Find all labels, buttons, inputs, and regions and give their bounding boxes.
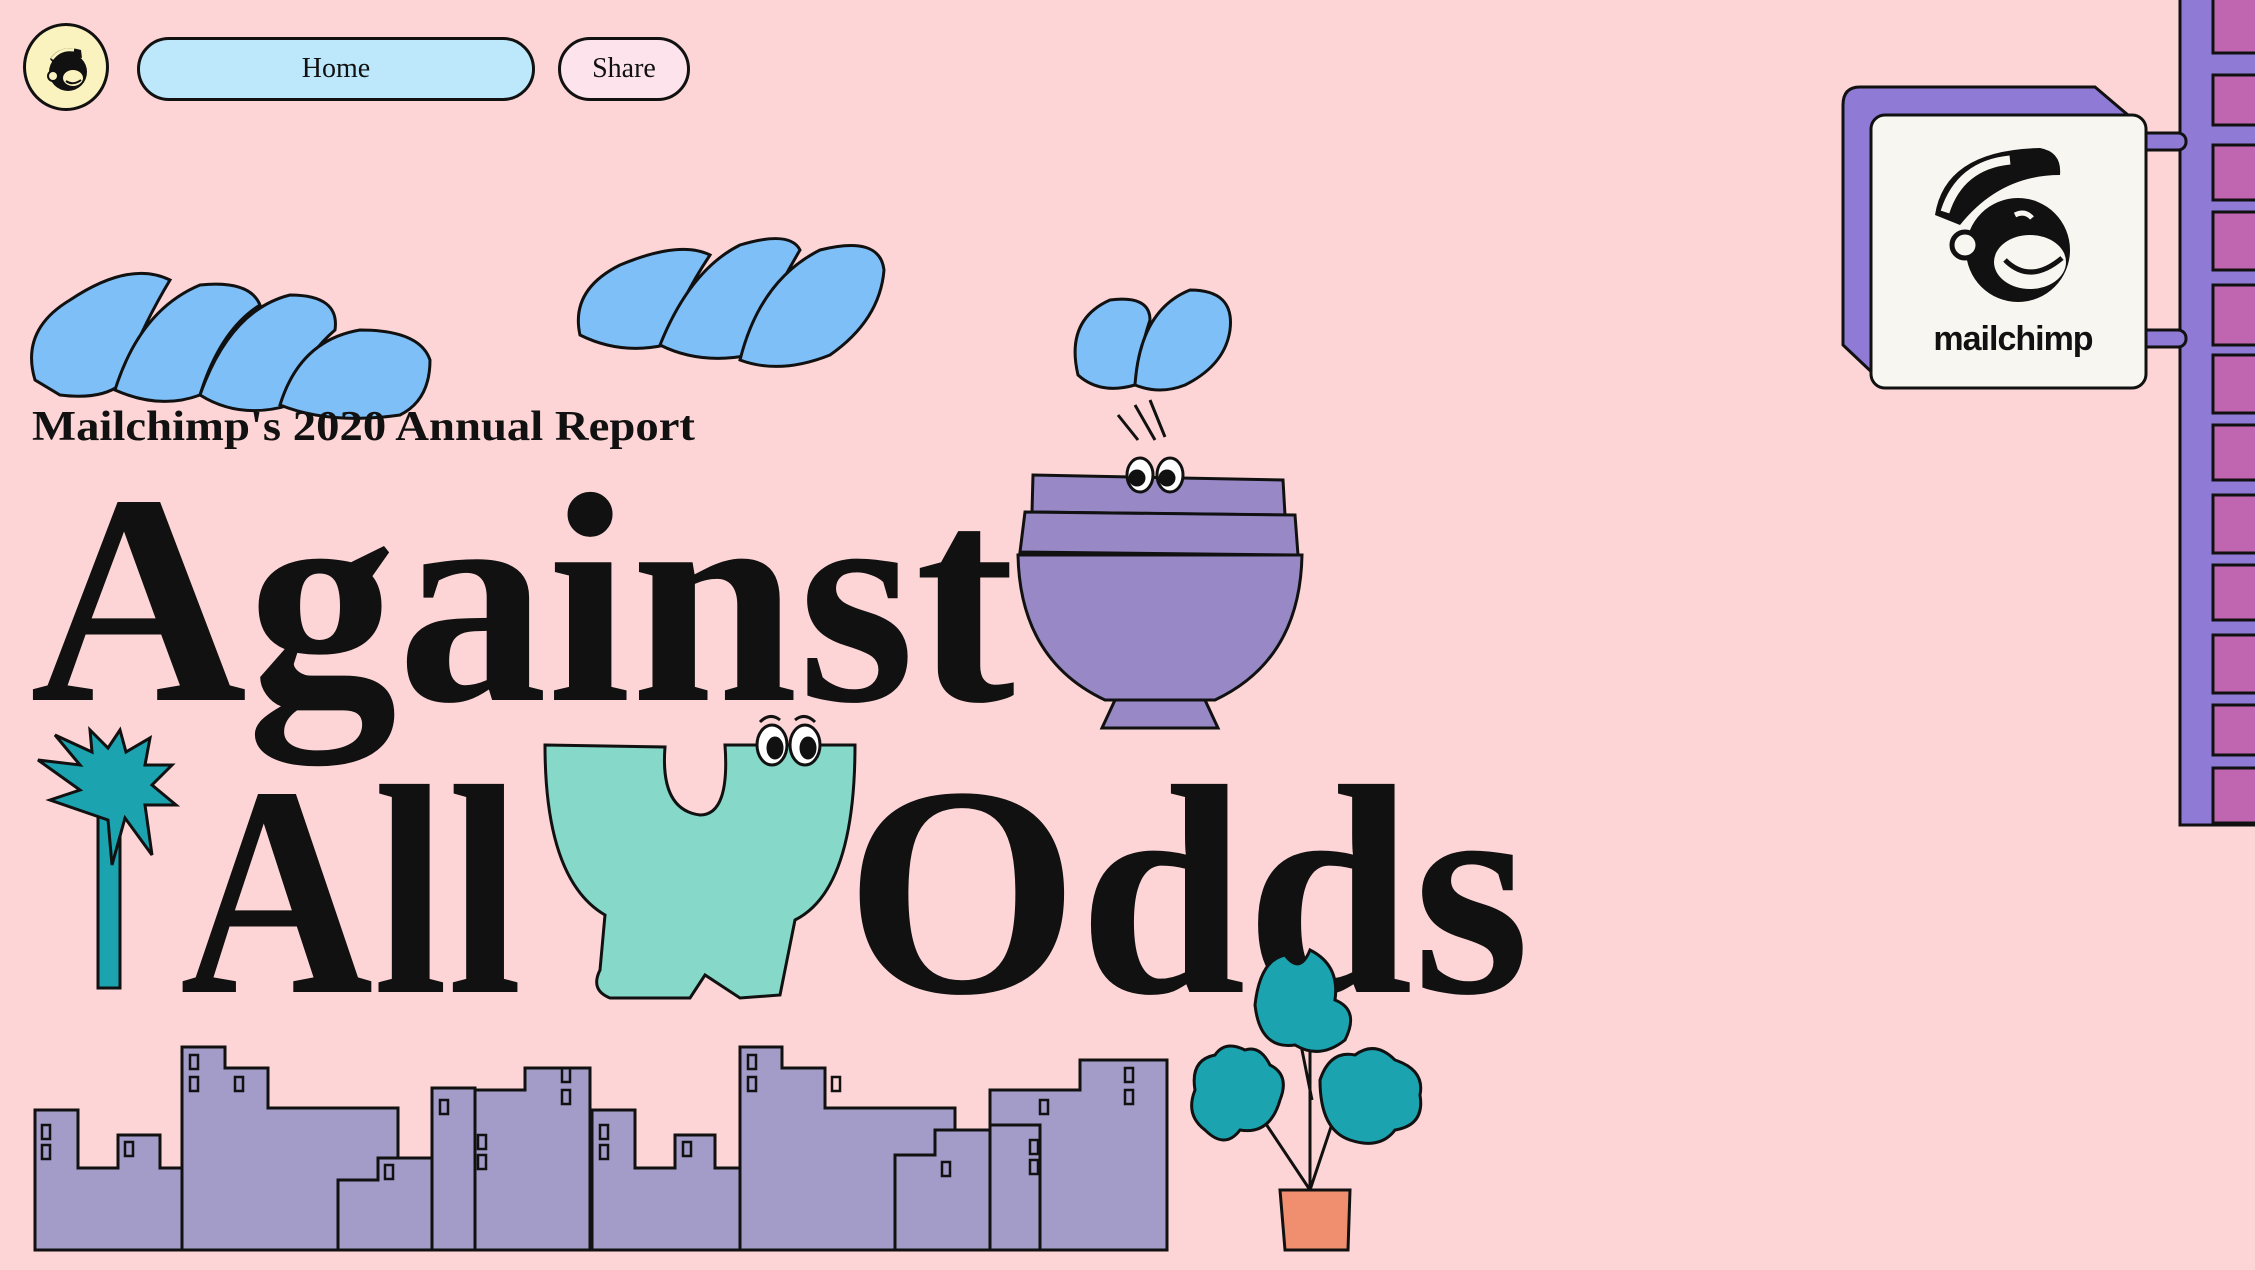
potted plant [1192,950,1421,1250]
sign text: mailchimp [1933,320,2093,358]
bowl stack [1018,458,1302,728]
nav: Home button: Home [302,53,370,84]
heading: Odds: Odds [845,725,1530,1057]
palm tree [38,730,176,988]
nav: Home button [137,37,535,101]
heading: All: All [180,725,522,1057]
teal creature [545,716,855,998]
cloud 1 [32,273,430,418]
cloud 3 (steam) [1075,290,1230,440]
heading: Against: Against [30,433,1018,770]
nav: Share button [558,37,690,101]
sign: mailchimp [1843,87,2186,388]
subtitle: Mailchimp's 2020 Annual Report [32,404,695,450]
icon: chimp head [1935,148,2070,302]
brick wall [2180,0,2255,825]
buildings skyline [35,1047,1167,1250]
nav: Share button: Share [592,53,656,84]
cloud 2 [578,239,884,366]
nav: logo badge [23,23,109,111]
